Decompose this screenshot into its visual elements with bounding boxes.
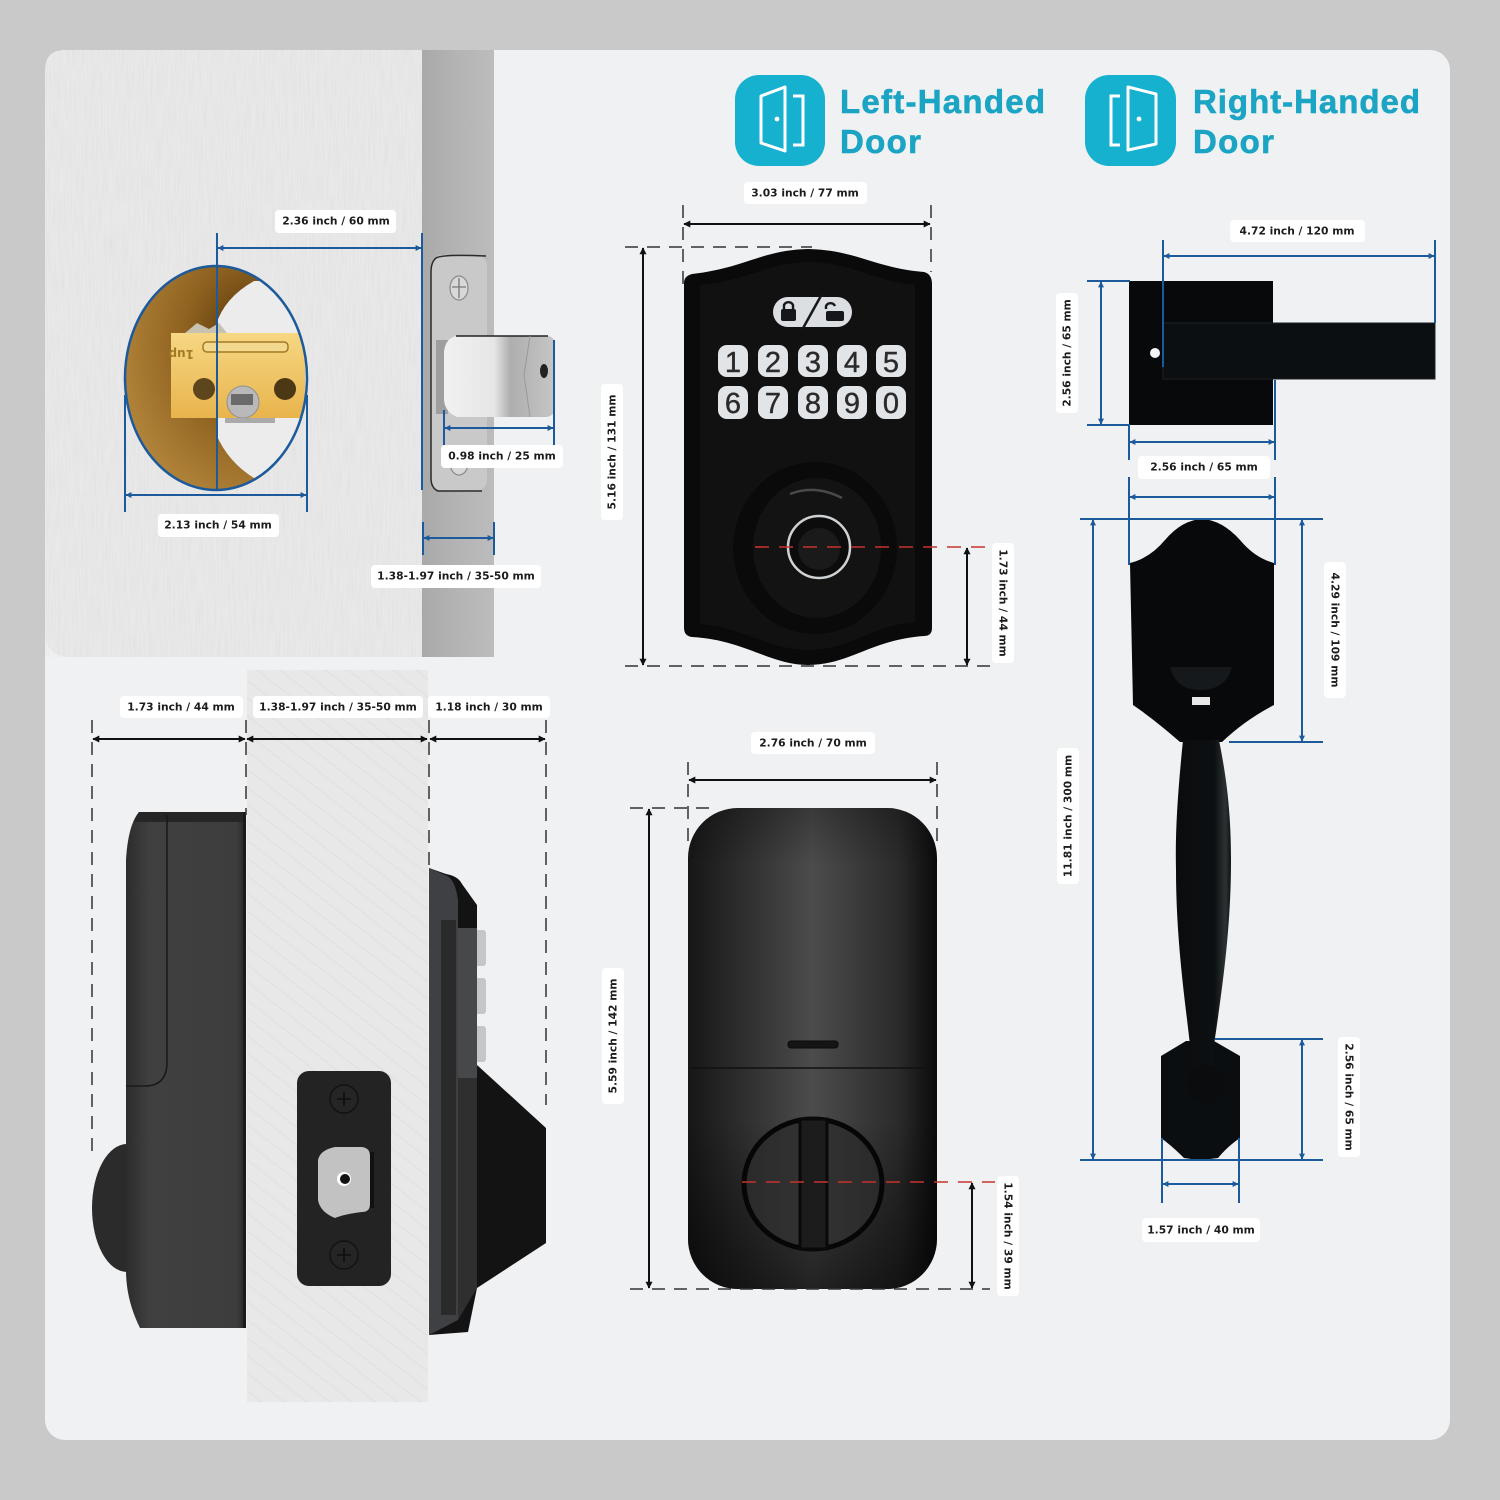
heading line two: Door (1193, 123, 1274, 160)
dimension: backset (217, 233, 422, 490)
label: keypad height: 5.16 inch / 131 mm (606, 395, 618, 509)
door frame edge (422, 50, 494, 657)
lock unlock button (773, 294, 852, 330)
lever rose plate (1129, 281, 1273, 425)
keypad digits (718, 345, 906, 420)
heading: left-handed door: Left-Handed (840, 83, 1045, 120)
keypad body (684, 249, 932, 665)
grip handle (1130, 519, 1274, 1160)
label: keypad centre height (992, 543, 1014, 663)
cover seam (690, 1067, 930, 1069)
label: keypad centre height: 1.73 inch / 44 mm (996, 549, 1010, 657)
label: back unit centre height (997, 1176, 1019, 1296)
indicator slot (788, 1041, 838, 1048)
handle dimension: bottom plate width (1162, 1138, 1239, 1203)
dimension: bolt width (444, 340, 554, 445)
label: back unit height: 5.59 inch / 142 mm (606, 979, 620, 1093)
lever dimension: length (1163, 240, 1435, 367)
label: bottom plate height: 2.56 inch / 65 mm (1342, 1043, 1356, 1151)
panel: door preparation (45, 50, 563, 657)
label: keypad width: 3.03 inch / 77 mm (751, 186, 859, 200)
handle dimension: total height (1080, 519, 1323, 1160)
label: bottom plate width: 1.57 inch / 40 mm (1147, 1224, 1255, 1236)
keypad digits: 3 (805, 347, 821, 379)
door surface (45, 50, 422, 657)
heading line two: Door (840, 123, 921, 160)
dimension: bore diameter (125, 395, 307, 512)
latch plate (431, 255, 487, 491)
keypad digits: 2 (765, 347, 781, 379)
thumb latch tab (1192, 697, 1210, 705)
side dimension: interior depth (92, 720, 246, 1155)
keypad digits: 5 (883, 347, 899, 379)
label: keypad height (601, 384, 623, 520)
keypad digits: 0 (883, 388, 899, 420)
label: back unit height (602, 968, 624, 1104)
keypad dimension: height (625, 247, 990, 666)
door cross section (247, 670, 428, 1402)
bore hole with latch (125, 266, 320, 490)
thumb turn (744, 1119, 882, 1249)
door type: right-handed (1085, 75, 1420, 166)
bore hole with latch: 1up (168, 347, 194, 361)
door type: left-handed (735, 75, 1045, 166)
label: back unit centre height: 1.54 inch / 39 mm (1002, 1182, 1014, 1290)
label: exterior depth: 1.18 inch / 30 mm (435, 700, 543, 714)
back unit dimension: width (688, 762, 937, 845)
lever set screw (1150, 348, 1160, 358)
lever arm (1163, 323, 1435, 379)
thumb latch cut-out (1170, 667, 1232, 690)
label: total height (1057, 748, 1079, 884)
bottom escutcheon (1161, 1041, 1240, 1160)
latch bolt (436, 336, 555, 417)
label: rose width: 2.56 inch / 65 mm (1150, 460, 1258, 474)
keypad dimension: width (683, 205, 931, 290)
label: interior depth: 1.73 inch / 44 mm (127, 700, 235, 714)
label: bolt width (441, 445, 563, 468)
label: bore diameter (158, 514, 279, 537)
icon: left-handed door (735, 75, 825, 166)
label: door thickness: 1.38-1.97 inch / 35-50 mm (377, 570, 535, 582)
label: bore diameter: 2.13 inch / 54 mm (164, 518, 272, 532)
label: bottom plate width (1142, 1218, 1260, 1242)
label: backset: 2.36 inch / 60 mm (282, 214, 390, 228)
keypad dimension: thumbturn centre (755, 547, 990, 665)
label: back unit width: 2.76 inch / 70 mm (759, 736, 867, 750)
keypad digits: 4 (844, 347, 860, 379)
grip (1176, 740, 1231, 1085)
label: interior depth (120, 696, 243, 718)
side dimension: door thickness (247, 720, 429, 870)
handle dimension: bottom plate height (1215, 1039, 1323, 1159)
handle dimension: top plate height (1229, 520, 1323, 742)
keypad front view (684, 249, 932, 665)
label: keypad width (744, 182, 867, 204)
keypad digits: 8 (805, 388, 821, 420)
label: back unit width (751, 732, 875, 754)
label: bolt width: 0.98 inch / 25 mm (448, 450, 556, 462)
lever handle (1129, 281, 1435, 425)
label: top plate height: 4.29 inch / 109 mm (1328, 573, 1342, 687)
fingerprint reader (733, 462, 897, 634)
back unit dimension: height (630, 808, 990, 1289)
label: lever length (1230, 220, 1365, 242)
interior unit side (92, 812, 246, 1328)
side view of lock through door (92, 670, 546, 1402)
side dimension: exterior depth (430, 720, 546, 1105)
strike plate (297, 1071, 391, 1286)
label: rose height (1056, 293, 1078, 413)
keypad digits: 6 (725, 388, 741, 420)
top escutcheon (1130, 519, 1274, 742)
label: rose width (1138, 456, 1270, 479)
label: top plate height (1324, 562, 1346, 698)
keypad digits: 1 (725, 347, 741, 379)
lever dimension: rose width (1129, 380, 1275, 460)
label: total height: 11.81 inch / 300 mm (1062, 755, 1074, 877)
grip ball foot (1187, 1065, 1225, 1103)
handle dimension: width (1129, 477, 1275, 565)
icon: right-handed door (1085, 75, 1176, 166)
label: backset (275, 210, 396, 233)
label: lever length: 4.72 inch / 120 mm (1240, 224, 1354, 238)
label: side door thickness (253, 696, 423, 718)
heading: right-handed door: Right-Handed (1193, 83, 1420, 120)
label: rose height: 2.56 inch / 65 mm (1060, 299, 1074, 407)
dimension: door thickness (423, 522, 494, 555)
back unit dimension: thumb turn centre (742, 1182, 995, 1288)
interior back unit (688, 808, 937, 1289)
keypad digits: 9 (844, 388, 860, 420)
lever dimension: rose height (1087, 281, 1130, 425)
label: door thickness (371, 565, 541, 588)
label: side door thickness: 1.38-1.97 inch / 35-50 mm (259, 700, 417, 714)
label: exterior depth (428, 696, 550, 718)
keypad unit side (429, 868, 546, 1335)
keypad digits: 7 (765, 388, 781, 420)
back cover (688, 808, 937, 1289)
label: bottom plate height (1338, 1037, 1360, 1157)
